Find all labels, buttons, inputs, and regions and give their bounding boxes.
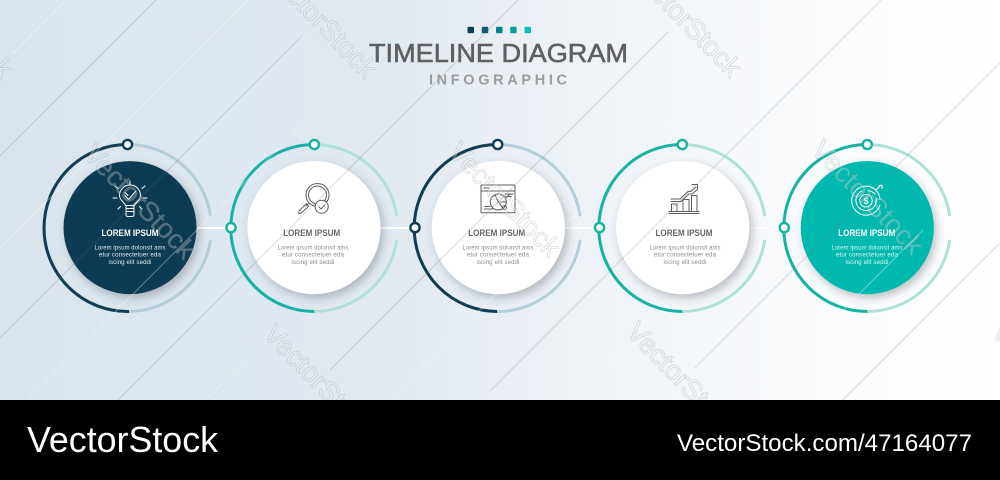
panel: step 5 xyxy=(780,140,950,312)
ring xyxy=(595,140,765,312)
body text: etur consectetuer eda xyxy=(836,252,898,259)
body text: etur consectetuer eda xyxy=(282,252,344,259)
panel: step 4 xyxy=(595,140,765,312)
body text xyxy=(94,244,166,266)
body text: iscing elit seddi xyxy=(108,259,152,266)
body text xyxy=(650,244,721,266)
disc xyxy=(432,161,565,294)
ring xyxy=(410,140,580,312)
body text: Lorem ipsum dolonsit ams xyxy=(832,244,903,251)
watermarks: VectorStock xyxy=(443,136,567,263)
ring xyxy=(780,140,950,312)
ring xyxy=(44,140,210,312)
label: LOREM IPSUM xyxy=(468,228,525,239)
label: LOREM IPSUM xyxy=(838,228,895,239)
body text: Lorem ipsum dolonsit ams xyxy=(462,244,534,251)
icon: growth bar chart xyxy=(669,184,699,214)
body text xyxy=(462,244,534,266)
label: LOREM IPSUM xyxy=(656,228,713,239)
body text: iscing elit seddi xyxy=(292,259,335,266)
icon: dollar target maze xyxy=(852,185,882,215)
panel: step 2 xyxy=(226,140,397,312)
subheading: INFOGRAPHIC xyxy=(429,72,568,88)
footer logo: VectorStock xyxy=(27,419,219,460)
body text: etur consectetuer eda xyxy=(99,252,161,259)
watermarks: VectorStock xyxy=(806,134,930,261)
disc xyxy=(247,161,381,294)
icon: dollar target maze: $ xyxy=(863,196,869,206)
body text: Lorem ipsum dolonsit ams xyxy=(278,244,349,251)
disc xyxy=(801,161,934,294)
heading: TIMELINE DIAGRAM xyxy=(369,40,628,68)
footer bar xyxy=(0,400,1000,480)
body text: iscing elit seddi xyxy=(846,259,889,266)
icon: magnifier with check xyxy=(299,184,329,214)
disc xyxy=(616,161,749,294)
colour dots xyxy=(468,27,531,33)
body text: Lorem ipsum dolonsit ams xyxy=(94,244,166,251)
body text: etur consectetuer eda xyxy=(654,252,716,259)
watermarks: VectorStock xyxy=(621,316,745,443)
label: LOREM IPSUM xyxy=(102,228,159,239)
footer url: VectorStock.com/47164077 xyxy=(677,430,972,457)
icon: light bulb xyxy=(113,181,147,216)
body text: etur consectetuer eda xyxy=(467,252,529,259)
icon: browser with pie chart xyxy=(481,185,515,213)
watermarks: VectorStock xyxy=(258,318,382,445)
body text: Lorem ipsum dolonsit ams xyxy=(650,244,721,251)
label: LOREM IPSUM xyxy=(283,228,340,239)
body text xyxy=(832,244,903,266)
panel: step 3 xyxy=(410,140,580,312)
panel: step 1 xyxy=(44,140,210,312)
disc xyxy=(64,161,196,294)
body text: iscing elit seddi xyxy=(664,259,707,266)
body text xyxy=(278,244,349,266)
ring xyxy=(226,140,397,312)
connector lines xyxy=(195,227,785,229)
body text: iscing elit seddi xyxy=(476,259,520,266)
watermarks: VectorStock xyxy=(78,138,202,265)
title block xyxy=(369,27,628,88)
